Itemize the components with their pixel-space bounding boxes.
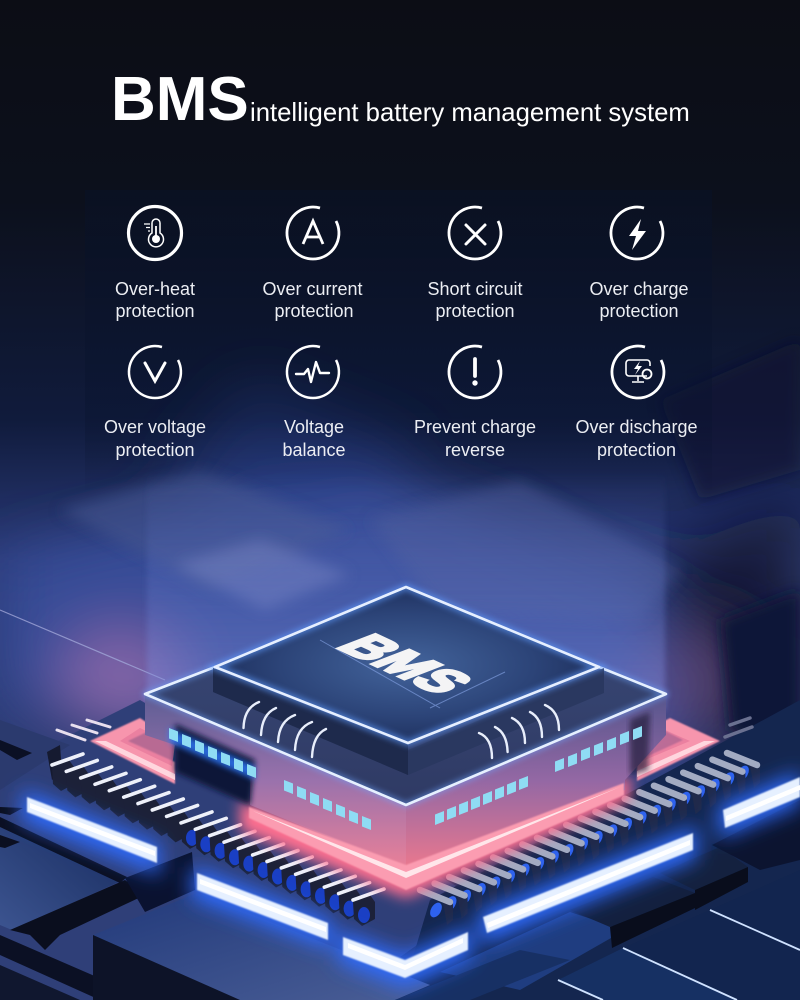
light beams rising from chip [147,470,665,710]
feature: prevent charge reverse: reverse [445,440,505,460]
top chip [213,587,604,775]
feature: over-heat protection [115,206,195,321]
block: front right faces [395,800,800,1000]
feature: over charge protection: Over charge [589,279,689,299]
package body [145,590,666,890]
feature: short circuit protection [427,207,523,321]
translucent feature panel [85,190,712,490]
feature: voltage balance: Voltage [284,417,344,437]
feature: over current protection [262,207,363,321]
feature: over voltage protection [104,346,206,460]
chip label: BMS: BMS [323,628,488,700]
feature: over current protection: Over current [262,279,363,299]
feature: over discharge protection [575,346,698,460]
feature: short circuit protection: protection [435,301,515,321]
feature: over charge protection [589,207,689,321]
bright traces bottom right [558,910,800,1000]
feature: over charge protection: protection [599,301,679,321]
feature: over-heat protection: Over-heat [115,279,195,299]
LED rows on package side [169,726,642,830]
feature: short circuit protection: Short circuit [427,279,523,299]
feature: prevent charge reverse [414,346,536,460]
package outline [145,667,666,805]
feature: over-heat protection: protection [115,301,195,321]
left pin row [52,754,384,926]
feature: voltage balance: balance [282,440,346,460]
feature: over discharge protection: Over discharge [575,417,698,437]
ground blocks around chip [0,700,800,1000]
feature: over voltage protection: protection [115,440,195,460]
title: BMS [111,65,249,134]
upper corner pins [47,718,752,780]
feature: prevent charge reverse: Prevent charge [414,417,536,437]
title: intelligent battery management system [250,99,690,127]
glowing light bars [22,772,800,988]
title [111,65,690,134]
block: front centre face [93,893,430,1000]
feature: over current protection: protection [274,301,354,321]
feature: over voltage protection: Over voltage [104,417,206,437]
block: lower-left face [0,740,195,1000]
right pin row [420,753,760,925]
bond wires [244,702,559,758]
feature: voltage balance [282,346,346,460]
pink base rings [90,718,720,898]
feature: over discharge protection: protection [597,440,676,460]
